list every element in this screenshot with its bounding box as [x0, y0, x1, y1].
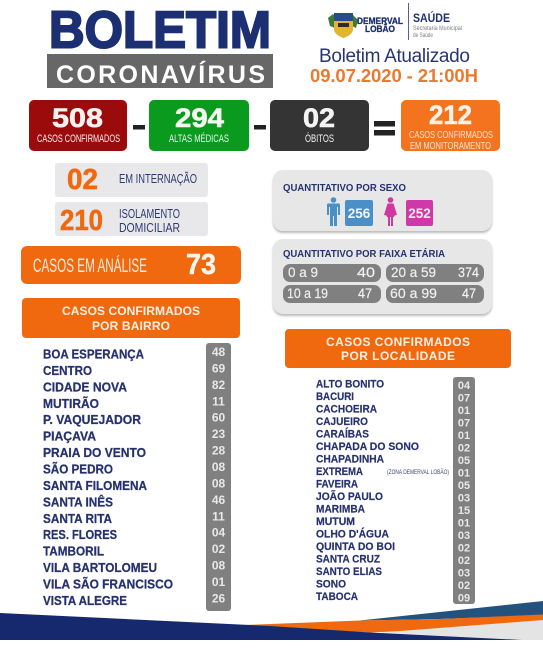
neighbourhood names list: VILA BARTOLOMEU	[43, 561, 157, 575]
logo: Demerval Lobão / Saúde: LOBÃO	[365, 24, 395, 35]
locality names list: SANTA CRUZ	[316, 554, 380, 566]
age pill: 0 a 9: 0 a 9	[288, 265, 318, 280]
locality names list: JOÃO PAULO	[316, 490, 383, 503]
neighbourhood counts column: 08	[212, 476, 225, 490]
neighbourhood counts column: 69	[212, 361, 225, 375]
neighbourhood names list: RES. FLORES	[43, 528, 117, 542]
logo: Demerval Lobão / Saúde	[328, 3, 462, 40]
locality names list: QUINTA DO BOI	[316, 541, 395, 553]
locality names list: CAJUEIRO	[316, 416, 368, 428]
heading: cases by locality: POR LOCALIDADE	[341, 349, 455, 363]
locality counts column: 07	[458, 418, 470, 430]
stat: confirmed cases	[29, 100, 127, 151]
logo: Demerval Lobão / Saúde: de Saúde	[413, 33, 434, 39]
neighbourhood counts column: 46	[212, 493, 225, 507]
age pill: 10 a 19: 10 a 19	[287, 286, 328, 301]
locality names list: CARAÍBAS	[316, 428, 369, 441]
locality counts column: 04	[458, 380, 471, 392]
equals sign	[374, 121, 395, 136]
age pill: 60 a 99: 60 a 99	[390, 286, 437, 301]
age pill: 20 a 59: 20 a 59	[391, 265, 436, 280]
locality counts column: 03	[458, 492, 470, 504]
locality names list: FAVEIRA	[316, 479, 358, 491]
stat: deaths: ÓBITOS	[305, 132, 334, 145]
icon: municipal crest	[328, 13, 358, 38]
neighbourhood counts column: 11	[212, 394, 225, 408]
panel: quantity by sex: QUANTITATIVO POR SEXO	[283, 183, 406, 194]
logo: Demerval Lobão / Saúde: DEMERVAL	[357, 16, 403, 27]
stat: monitoring: CASOS CONFIRMADOS	[409, 129, 493, 141]
neighbourhood counts column	[206, 343, 231, 611]
neighbourhood counts column: 01	[212, 575, 225, 589]
neighbourhood names list: PRAIA DO VENTO	[43, 446, 146, 460]
subtitle banner: Coronavírus: CORONAVÍRUS	[56, 60, 265, 89]
logo: Demerval Lobão / Saúde: SAÚDE	[413, 12, 450, 25]
neighbourhood names list: SANTA FILOMENA	[43, 479, 147, 493]
locality names list: CHAPADINHA	[316, 454, 384, 466]
neighbourhood counts column: 60	[212, 411, 225, 425]
locality counts column: 02	[458, 542, 470, 554]
minus sign	[254, 125, 266, 130]
neighbourhood names list: MUTIRÃO	[43, 396, 99, 411]
update heading: 09.07.2020 - 21:00H	[310, 65, 478, 86]
stat: deaths: 02	[303, 103, 335, 133]
locality counts column: 02	[458, 580, 470, 592]
neighbourhood names list: SANTA RITA	[43, 512, 112, 526]
neighbourhood names list: VILA SÃO FRANCISCO	[43, 576, 173, 592]
female count: 252	[408, 206, 431, 221]
male count	[345, 200, 373, 226]
locality names list: SANTO ELIAS	[316, 566, 382, 578]
age pill: 0 a 9	[283, 264, 381, 282]
neighbourhood names list: CIDADE NOVA	[43, 380, 127, 394]
panel: home isolation: ISOLAMENTO	[119, 206, 180, 221]
heading: cases by neighbourhood	[22, 298, 240, 338]
stat: confirmed cases: CASOS CONFIRMADOS	[37, 133, 120, 145]
locality counts column	[453, 377, 475, 604]
locality counts column: 01	[458, 518, 470, 530]
stat: deaths	[270, 100, 369, 151]
heading: cases by locality: CASOS CONFIRMADOS	[326, 335, 470, 349]
heading: cases by neighbourhood: POR BAIRRO	[92, 319, 170, 333]
locality names list: ALTO BONITO	[316, 379, 384, 391]
age pill: 20 a 59	[386, 264, 484, 282]
age pill: 60 a 99	[386, 285, 484, 303]
minus sign	[133, 125, 145, 130]
locality counts column: 05	[458, 455, 470, 467]
stat: medical discharges	[149, 100, 249, 151]
locality counts column: 01	[458, 468, 470, 480]
neighbourhood names list: BOA ESPERANÇA	[43, 348, 144, 362]
neighbourhood counts column: 08	[212, 460, 225, 474]
locality names list: OLHO D'ÁGUA	[316, 528, 389, 541]
panel: cases under analysis: CASOS EM ANÁLISE	[33, 256, 147, 277]
panel: quantity by age group	[273, 239, 492, 314]
locality counts column: 01	[458, 430, 470, 442]
neighbourhood counts column: 02	[212, 542, 225, 556]
locality names list: TABOCA	[316, 591, 358, 603]
locality names list: EXTREMA	[316, 466, 363, 478]
male count: 256	[348, 206, 371, 221]
icon: woman	[384, 197, 397, 226]
age pill: 0 a 9: 40	[357, 265, 375, 280]
update heading: Boletim Atualizado	[319, 46, 470, 67]
locality names list: CACHOEIRA	[316, 404, 377, 416]
locality names list: MARIMBA	[316, 504, 365, 516]
locality counts column: 07	[458, 392, 470, 404]
neighbourhood names list: VISTA ALEGRE	[43, 594, 127, 608]
neighbourhood names list: PIAÇAVA	[43, 430, 96, 444]
panel: home isolation: 210	[60, 205, 103, 237]
locality counts column: 02	[458, 555, 470, 567]
heading: cases by locality	[285, 329, 511, 368]
female count	[406, 200, 433, 226]
stat: medical discharges: 294	[175, 103, 224, 133]
locality counts column: 03	[458, 530, 470, 542]
panel: home isolation: DOMICILIAR	[119, 220, 180, 235]
neighbourhood counts column: 82	[212, 378, 225, 392]
age pill: 10 a 19: 47	[358, 286, 372, 301]
update heading	[310, 46, 478, 86]
panel: hospitalized: EM INTERNAÇÃO	[119, 171, 197, 186]
neighbourhood counts column: 26	[212, 591, 225, 605]
panel: hospitalized: 02	[67, 164, 98, 196]
panel: quantity by sex	[273, 170, 492, 231]
locality names list: MUTUM	[316, 516, 355, 528]
stat: confirmed cases: 508	[52, 103, 103, 133]
neighbourhood counts column: 04	[212, 526, 225, 540]
stat: monitoring: 212	[429, 100, 472, 130]
neighbourhood counts column: 48	[212, 345, 225, 359]
locality names list	[316, 379, 449, 603]
locality counts column: 02	[458, 442, 470, 454]
age pill: 20 a 59: 374	[458, 265, 479, 280]
panel: home isolation	[55, 202, 208, 237]
neighbourhood counts column: 11	[212, 509, 225, 523]
logo: Demerval Lobão / Saúde: Secretaria Municipal	[413, 26, 462, 32]
neighbourhood names list: TAMBORIL	[43, 545, 104, 559]
neighbourhood names list: SÃO PEDRO	[43, 462, 113, 476]
age pill: 60 a 99: 47	[462, 286, 476, 301]
stat: monitoring	[401, 100, 500, 152]
neighbourhood names list: CENTRO	[43, 364, 92, 378]
footer wave bands	[0, 601, 543, 640]
panel: quantity by age group: QUANTITATIVO POR FAIXA ETÁRIA	[283, 247, 445, 260]
neighbourhood names list: P. VAQUEJADOR	[43, 413, 141, 427]
locality counts column: 01	[458, 405, 470, 417]
locality names list: CHAPADA DO SONO	[316, 441, 419, 453]
title: Boletim: BOLETIM	[49, 2, 271, 60]
locality counts column: 09	[458, 592, 470, 604]
locality counts column: 03	[458, 568, 470, 580]
neighbourhood counts column: 28	[212, 444, 225, 458]
locality names list: BACURI	[316, 391, 354, 403]
locality names list: (ZONA DEMERVAL LOBÃO)	[387, 467, 449, 476]
neighbourhood names list: SANTA INÊS	[43, 494, 113, 509]
panel: cases under analysis	[21, 246, 241, 284]
neighbourhood names list	[43, 348, 173, 608]
age pill: 10 a 19	[283, 285, 381, 303]
neighbourhood counts column: 08	[212, 559, 225, 573]
stat: monitoring: EM MONITORAMENTO	[410, 140, 491, 152]
locality counts column: 15	[458, 505, 470, 517]
panel: hospitalized	[55, 163, 208, 197]
locality names list: SONO	[316, 579, 346, 591]
locality counts column: 05	[458, 480, 470, 492]
stat: medical discharges: ALTAS MÉDICAS	[169, 132, 229, 145]
neighbourhood counts column: 23	[212, 427, 225, 441]
heading: cases by neighbourhood: CASOS CONFIRMADOS	[62, 304, 200, 318]
panel: cases under analysis: 73	[186, 249, 216, 281]
icon: man	[327, 197, 340, 226]
